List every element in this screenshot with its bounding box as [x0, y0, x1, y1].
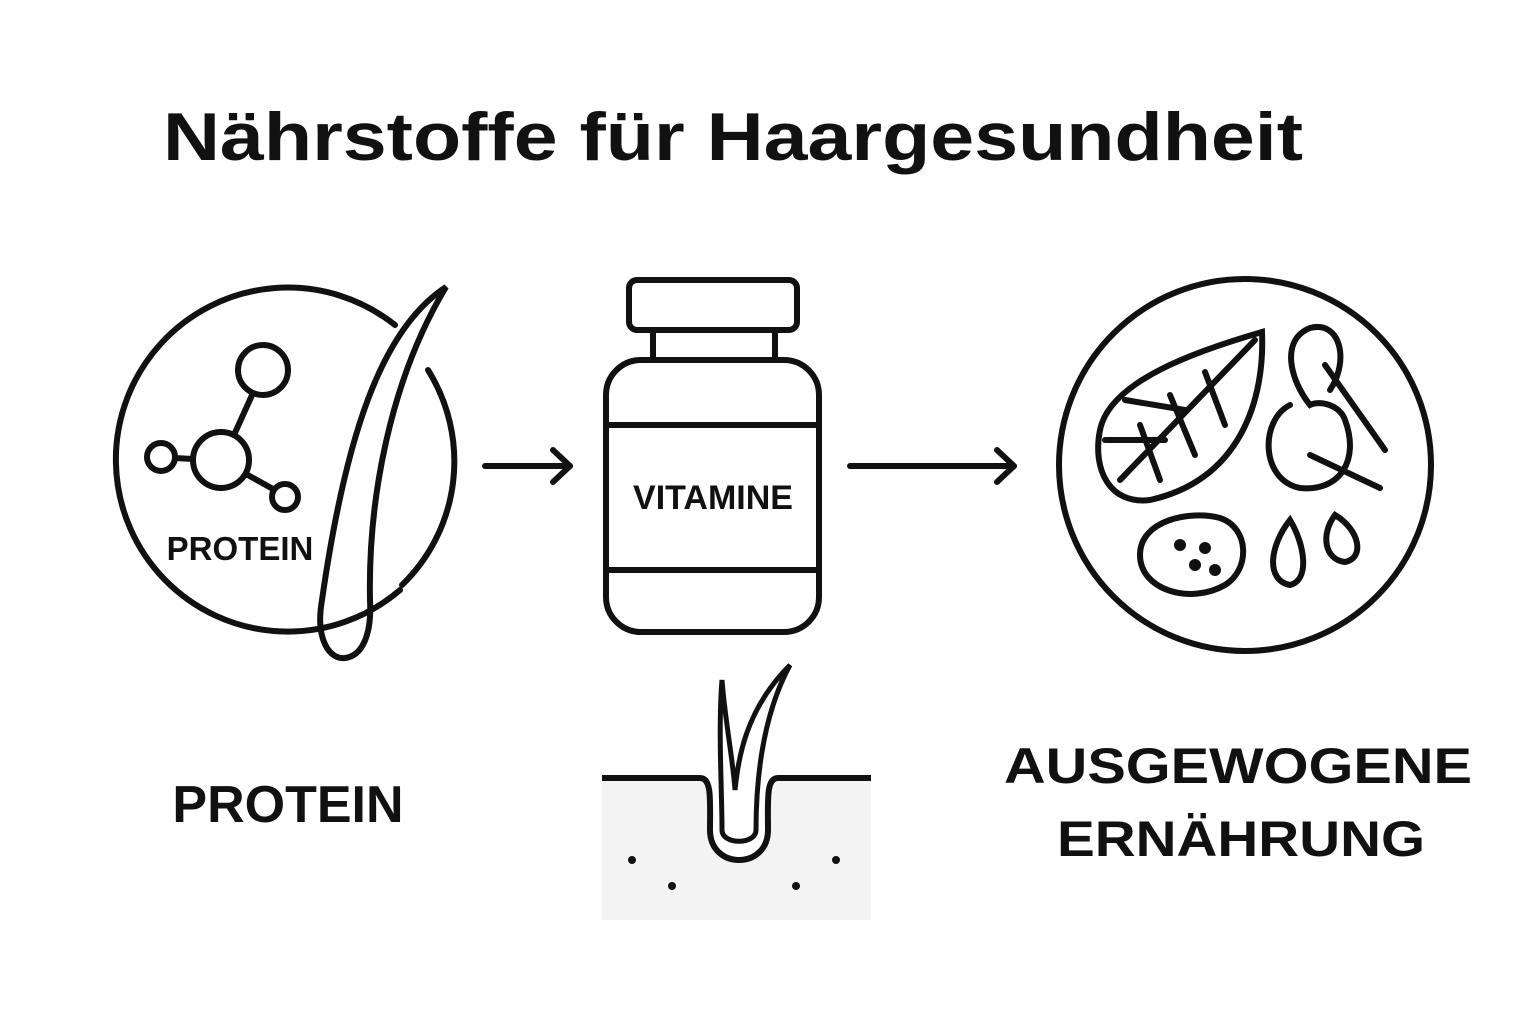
- icon: potato: [1140, 515, 1243, 594]
- panel: protein icon: [116, 287, 454, 658]
- icon: hair strand: [320, 287, 446, 658]
- label: ausgewogene ernährung: ERNÄHRUNG: [1057, 811, 1425, 867]
- label: vitamine: VITAMINE: [633, 479, 793, 517]
- label: ausgewogene ernährung: AUSGEWOGENE: [1004, 738, 1472, 794]
- title: Nährstoffe für Haargesundheit: [163, 99, 1303, 175]
- arrow 1: [485, 450, 570, 482]
- icon: seeds: [1273, 515, 1357, 585]
- arrow 2: [850, 450, 1014, 482]
- icon: vitamin bottle: [606, 280, 819, 632]
- label: protein: PROTEIN: [172, 776, 404, 834]
- icon: molecule: [147, 345, 298, 510]
- label: ausgewogene ernährung: [1004, 738, 1472, 867]
- panel: balanced diet plate: [1059, 279, 1431, 651]
- icon: hair follicle: [602, 665, 871, 920]
- label: protein in circle: PROTEIN: [167, 530, 313, 567]
- icon: spinach leaf: [1269, 327, 1385, 488]
- icon: fish: [1098, 332, 1262, 500]
